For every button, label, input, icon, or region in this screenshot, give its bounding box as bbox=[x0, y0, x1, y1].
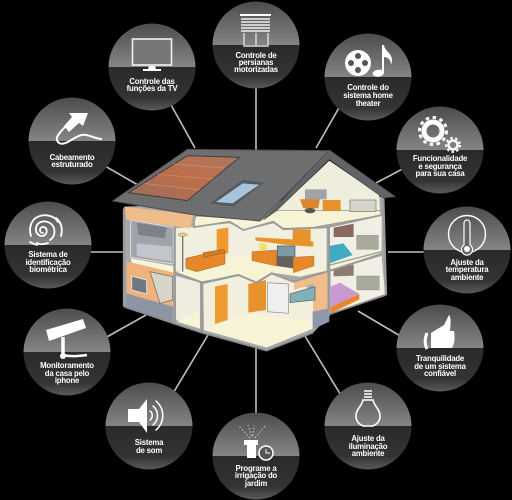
right upper room bbox=[330, 216, 382, 264]
attic furniture bbox=[323, 200, 341, 211]
ground floor room bbox=[203, 274, 313, 347]
label: home theater: theater bbox=[356, 99, 380, 108]
icon: light bulb bbox=[356, 391, 380, 426]
middle wall bbox=[175, 223, 327, 272]
label: sound: de som bbox=[136, 446, 162, 455]
small ground room bbox=[176, 276, 200, 327]
label: irrigation: Programe a bbox=[236, 464, 277, 473]
label: lighting: Ajuste da bbox=[351, 434, 386, 443]
label: blinds: persianas bbox=[239, 58, 274, 67]
structural walls and slabs bbox=[124, 197, 386, 351]
label: cabling: estruturado bbox=[51, 160, 93, 169]
badge: home theater bbox=[324, 34, 412, 120]
badge: structured cabling bbox=[28, 98, 116, 184]
icon: fingerprint bbox=[30, 215, 62, 245]
icon: security camera bbox=[46, 319, 87, 359]
label: TV: funções da TV bbox=[127, 84, 178, 93]
label: temperature: temperatura bbox=[446, 265, 489, 274]
label: blinds: motorizadas bbox=[234, 65, 279, 74]
icon: cable bbox=[57, 113, 102, 144]
stone base bbox=[126, 293, 173, 323]
sofa left bbox=[186, 249, 225, 272]
icon: sprinkler and clock bbox=[239, 425, 273, 460]
label: biometric: identificação bbox=[25, 258, 71, 267]
boiler bbox=[268, 283, 288, 313]
icon: speaker bbox=[128, 399, 163, 433]
label: functionality: e segurança bbox=[418, 162, 463, 171]
central house cutaway bbox=[113, 149, 395, 351]
label: monitoring: Monitoramento bbox=[40, 361, 94, 370]
lamp bbox=[181, 235, 185, 272]
kitchen bbox=[131, 220, 173, 264]
label: blinds: Controle de bbox=[235, 51, 277, 60]
icon: gears bbox=[420, 118, 460, 152]
badge: reliability bbox=[396, 304, 484, 392]
label: lighting: iluminação bbox=[349, 442, 388, 451]
label: monitoring: da casa pelo bbox=[45, 369, 90, 378]
label: sound: Sistema bbox=[135, 438, 164, 447]
attic floor bbox=[194, 211, 382, 230]
right lower room bbox=[331, 256, 385, 313]
connector lines bbox=[88, 85, 424, 416]
roof window bbox=[210, 180, 264, 207]
label: monitoring: iphone bbox=[55, 376, 80, 385]
left lower orange wall bbox=[127, 262, 173, 307]
right roof slope bbox=[263, 150, 395, 220]
orange doors ground bbox=[215, 284, 228, 324]
badge: biometric identification bbox=[4, 202, 92, 288]
label: functionality: Funcionalidade bbox=[413, 154, 468, 163]
badge: lighting bbox=[324, 382, 412, 470]
label: functionality: para sua casa bbox=[416, 169, 465, 178]
label: home theater: Controle do bbox=[347, 83, 389, 92]
label: cabling: Cabeamento bbox=[50, 153, 95, 162]
house outer walls bbox=[124, 197, 386, 351]
label: reliability: Tranquilidade bbox=[416, 354, 465, 363]
icon: blinds bbox=[240, 14, 271, 46]
solar panel bbox=[128, 156, 239, 201]
label: temperature: ambiente bbox=[451, 273, 484, 282]
label: TV: Controle das bbox=[129, 77, 175, 86]
label: reliability: confiável bbox=[424, 369, 456, 378]
label: irrigation: irrigação do bbox=[235, 471, 278, 480]
middle floor bbox=[176, 254, 327, 282]
label: biometric: biométrica bbox=[29, 265, 68, 274]
badge: camera monitoring bbox=[24, 308, 110, 396]
badge: garden irrigation bbox=[212, 412, 300, 500]
label: irrigation: jardim bbox=[244, 479, 267, 488]
label: reliability: de um sistema bbox=[414, 362, 467, 371]
icon: television bbox=[132, 39, 172, 71]
label: lighting: ambiente bbox=[352, 449, 385, 458]
icon: film reel and note bbox=[345, 45, 392, 77]
icon: thermometer bbox=[448, 216, 486, 255]
badge: temperature bbox=[424, 206, 510, 294]
badge: functionality and security bbox=[396, 106, 484, 194]
utility wall orange bbox=[294, 271, 329, 312]
attic wall bbox=[277, 161, 380, 211]
roof bbox=[113, 149, 329, 221]
icon: thumbs up bbox=[425, 315, 455, 349]
label: home theater: sistema home bbox=[343, 91, 394, 100]
middle orange door bbox=[217, 227, 228, 255]
upper left orange wall bbox=[125, 207, 193, 228]
badge: TV control bbox=[108, 24, 196, 110]
label: temperature: Ajuste da bbox=[450, 258, 485, 267]
shelf bbox=[255, 237, 313, 247]
label: biometric: Sistema de bbox=[28, 250, 68, 259]
badge: blinds control bbox=[212, 2, 300, 88]
media unit bbox=[252, 250, 277, 266]
badge: sound bbox=[106, 382, 192, 470]
